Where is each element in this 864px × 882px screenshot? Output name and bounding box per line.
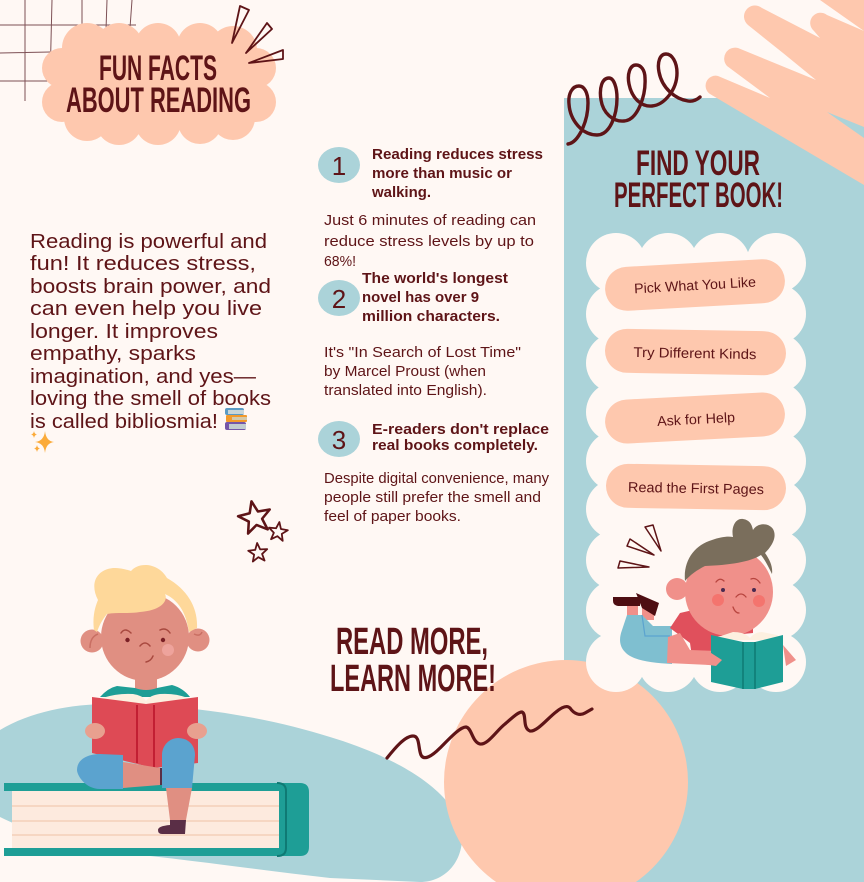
number badge 3 [318,421,360,457]
legs and shoes [613,593,672,664]
intro paragraph: loving the smell of books [30,387,271,410]
number 3: 3 [332,425,346,455]
fact 2 heading [362,271,508,325]
button: pick what you like: Pick What You Like [634,274,757,296]
icon: stack of books [225,408,247,430]
fact 2 body [324,345,521,399]
heading: read more, learn more: LEARN MORE! [330,658,496,700]
illustration: boy sitting on a book [4,565,309,856]
title cloud [42,23,276,145]
big book [4,783,309,856]
button: ask for help [604,391,786,445]
intro paragraph: Reading is powerful and [30,230,267,253]
panel: scalloped list card [586,233,806,692]
neck and shirt [100,675,190,706]
teal book [702,632,783,689]
fact 3 [318,421,550,525]
fact 3 body [324,471,550,525]
button: read the first pages: Read the First Pages [628,479,764,497]
fact 1 body: reduce stress levels by up to [324,234,534,250]
grid decoration [0,0,136,101]
fact 1 heading: more than music or [372,166,512,182]
button: read the first pages [606,463,786,511]
title: fun facts about reading: ABOUT READING [66,81,251,120]
boy head [80,565,210,681]
intro paragraph: empathy, sparks [30,342,196,365]
intro paragraph: longer. It improves [30,320,218,343]
wavy line [387,707,592,758]
burst spikes by title [232,6,283,63]
fact 1 body: 68%! [324,254,356,270]
fact 3 body: feel of paper books. [324,509,461,525]
intro paragraph: can even help you live [30,297,262,320]
intro paragraph: boosts brain power, and [30,275,271,298]
spikes by lying boy [618,525,661,568]
loop squiggle [568,54,700,144]
fact 3 heading: E-readers don't replace [372,422,549,438]
stars [236,498,289,562]
fact 2 body: translated into English). [324,383,487,399]
title: fun facts about reading: FUN FACTS [99,49,217,88]
fact 2 heading: million characters. [362,309,500,325]
button: try different kinds [605,328,786,376]
hands [85,723,207,739]
illustration: boy lying with a book [613,519,796,689]
title: fun facts about reading [66,49,251,120]
number badge 1 [318,147,360,183]
peach circle [444,660,688,882]
fact 2 body: by Marcel Proust (when [324,364,486,380]
arm and shirt [667,610,796,666]
red open book [92,697,198,768]
fact 1 [318,147,543,270]
number 1: 1 [332,151,346,181]
boy head with hair [666,519,775,636]
fact 1 heading: Reading reduces stress [372,147,543,163]
fact 3 heading [372,422,549,454]
intro paragraph: is called bibliosmia! [30,410,218,433]
intro paragraph [30,230,271,433]
icon: sparkles [31,431,54,453]
intro paragraph: fun! It reduces stress, [30,252,256,275]
fact 1 body: Just 6 minutes of reading can [324,213,536,229]
fact 2 body: It's "In Search of Lost Time" [324,345,521,361]
number 2: 2 [332,284,346,314]
heading: find your perfect book: FIND YOUR [636,144,760,183]
fact 3 heading: real books completely. [372,438,538,454]
legs [77,738,195,834]
fact 2 heading: novel has over 9 [362,290,479,306]
button: try different kinds: Try Different Kinds [633,344,757,362]
fact 3 body: Despite digital convenience, many [324,471,550,487]
fact 3 body: people still prefer the smell and [324,490,541,506]
fact 2 heading: The world's longest [362,271,508,287]
fact 1 heading: walking. [371,185,431,201]
blue blob bottom left [0,704,462,882]
intro paragraph: imagination, and yes— [30,365,257,388]
fact 1 body [324,213,536,270]
heading: read more, learn more: READ MORE, [336,621,488,663]
heading: read more, learn more [330,621,496,700]
number badge 2 [318,280,360,316]
button: pick what you like [604,258,786,312]
button: ask for help: Ask for Help [657,409,736,429]
fact 2 [318,271,521,399]
illustration: hand [706,0,864,185]
fact 1 heading [371,147,543,201]
heading: find your perfect book [614,144,783,215]
panel: right blue column [564,98,864,882]
